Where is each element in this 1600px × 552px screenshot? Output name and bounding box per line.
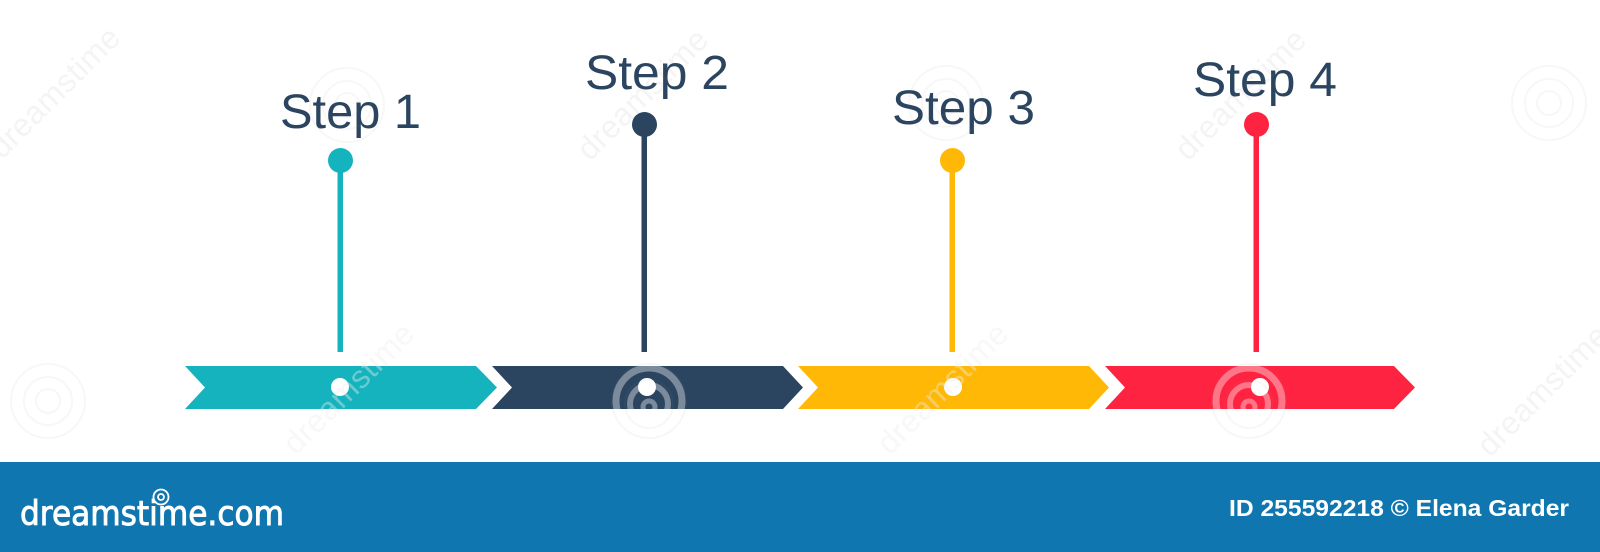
footer credit: ID 255592218 © Elena Garder xyxy=(1229,495,1569,521)
footer banner xyxy=(0,462,1600,552)
arrow segment 1: teal xyxy=(185,366,497,409)
watermark wordmarks over the bar: dreamstime xyxy=(275,315,421,461)
step 3 marker xyxy=(940,148,965,396)
watermark wordmarks: dreamstime xyxy=(1167,21,1313,167)
arrow segment 3: yellow xyxy=(798,366,1109,409)
watermark wordmarks: dreamstime xyxy=(275,315,421,461)
step 2 marker xyxy=(632,112,657,396)
step 4 marker xyxy=(1244,112,1269,396)
footer logo: dreamstime.com: dreamstime.com xyxy=(20,494,284,534)
heading: Step 3: Step 3 xyxy=(892,82,1035,135)
watermark spirals on white xyxy=(11,66,1586,438)
watermark wordmarks: dreamstime xyxy=(569,21,715,167)
heading: Step 4: Step 4 xyxy=(1193,54,1337,107)
icon: spiral xyxy=(154,490,168,504)
watermark wordmarks over the bar: dreamstime xyxy=(869,315,1015,461)
arrow segment 4: red xyxy=(1105,366,1415,409)
watermark wordmarks: dreamstime xyxy=(869,315,1015,461)
watermark wordmarks over the bar xyxy=(275,315,1015,461)
arrow segment 2: navy xyxy=(492,366,803,409)
watermark spirals on the bar xyxy=(616,368,1282,434)
step 1 marker xyxy=(328,148,353,396)
heading: Step 1: Step 1 xyxy=(280,86,421,139)
heading: Step 2: Step 2 xyxy=(585,47,729,100)
timeline arrow bar xyxy=(185,366,1415,409)
